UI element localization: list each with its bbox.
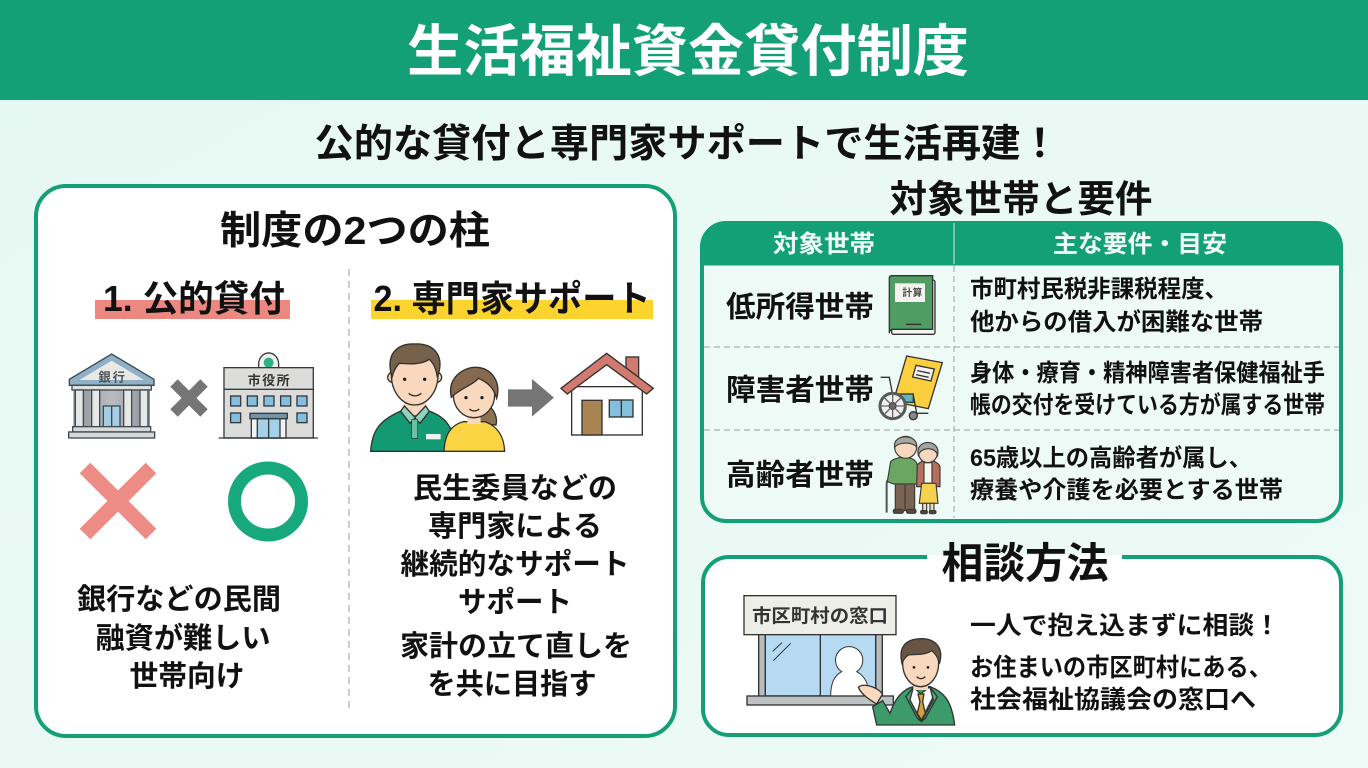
row: disability: 帳の交付を受けている方が属する世帯 xyxy=(970,391,1325,419)
row: elderly: 高齢者世帯 xyxy=(726,459,874,492)
table header: 主な要件・目安 xyxy=(1053,231,1227,258)
icon: city hall xyxy=(219,353,318,438)
text: consultation message: 社会福祉協議会の窓口へ xyxy=(970,686,1256,714)
row: low income: 市町村民税非課税程度、 xyxy=(970,276,1228,303)
icon: service counter and staff xyxy=(744,596,955,725)
row: disability: 身体・療育・精神障害者保健福祉手 xyxy=(970,360,1325,387)
text: pillar 2 description: 民生委員などの xyxy=(413,472,617,505)
panel: eligibility table xyxy=(702,223,1341,521)
advisor xyxy=(371,411,457,451)
text: pillar 2 description: サポート xyxy=(458,586,572,619)
row: disability: 障害者世帯 xyxy=(726,374,874,407)
icon: bank: 銀行 xyxy=(98,369,125,384)
text: pillar 1 description xyxy=(77,583,281,693)
table header: 対象世帯 xyxy=(773,231,875,258)
text: pillar 2 description xyxy=(400,472,632,701)
table header xyxy=(702,223,1341,264)
house xyxy=(626,357,639,377)
subtitle: 公的な貸付と専門家サポートで生活再建！ xyxy=(314,123,1060,166)
panel: consultation xyxy=(703,540,1341,735)
staff member xyxy=(873,687,955,725)
panel: two pillars xyxy=(36,186,675,736)
icon: wheelchair and notebook xyxy=(880,356,942,420)
icon: service counter and staff: 市区町村の窓口 xyxy=(752,606,888,627)
row: low income: 低所得世帯 xyxy=(726,291,874,324)
text: pillar 1 description: 融資が難しい xyxy=(96,621,270,655)
heading: target households: 対象世帯と要件 xyxy=(890,178,1152,220)
resident xyxy=(480,402,496,425)
text: pillar 1 description: 銀行などの民間 xyxy=(77,583,281,616)
row: elderly xyxy=(726,436,1283,514)
text: pillar 1 description: 世帯向け xyxy=(130,660,244,693)
icon: account book: 計算 xyxy=(902,287,923,299)
text: pillar 2 description: 家計の立て直しを xyxy=(400,630,632,663)
row: elderly: 療養や介護を必要とする世帯 xyxy=(970,477,1283,504)
text: pillar 2 description: 専門家による xyxy=(428,510,602,543)
icon: red cross mark xyxy=(85,468,151,534)
icon: cross between bank and city hall xyxy=(174,383,204,413)
row: elderly: 65歳以上の高齢者が属し、 xyxy=(970,444,1252,472)
icon: account book xyxy=(889,276,935,334)
text: consultation message xyxy=(970,612,1280,714)
title banner: 生活福祉資金貸付制度 xyxy=(407,20,969,83)
row: disability xyxy=(726,356,1325,420)
icon: elderly couple xyxy=(887,436,940,514)
icon: bank xyxy=(69,354,155,438)
icon: green circle mark xyxy=(234,468,302,535)
icon: advisor and resident to house xyxy=(371,344,653,451)
row: low income: 他からの借入が困難な世帯 xyxy=(970,308,1263,336)
consultation heading: 相談方法 xyxy=(942,540,1108,587)
text: pillar 2 description: を共に目指す xyxy=(428,668,596,701)
title banner xyxy=(0,0,1368,100)
pillars heading: 制度の2つの柱 xyxy=(220,210,490,253)
pillar 1 heading: 1. 公的貸付 xyxy=(103,278,285,319)
arrow xyxy=(508,379,554,417)
pillar 2 heading: 2. 専門家サポート xyxy=(374,278,650,319)
text: consultation message: 一人で抱え込まずに相談！ xyxy=(970,612,1280,640)
icon: city hall: 市役所 xyxy=(248,373,290,388)
text: consultation message: お住まいの市区町村にある、 xyxy=(970,654,1272,682)
row: low income xyxy=(726,276,1263,336)
text: pillar 2 description: 継続的なサポート xyxy=(400,548,630,581)
